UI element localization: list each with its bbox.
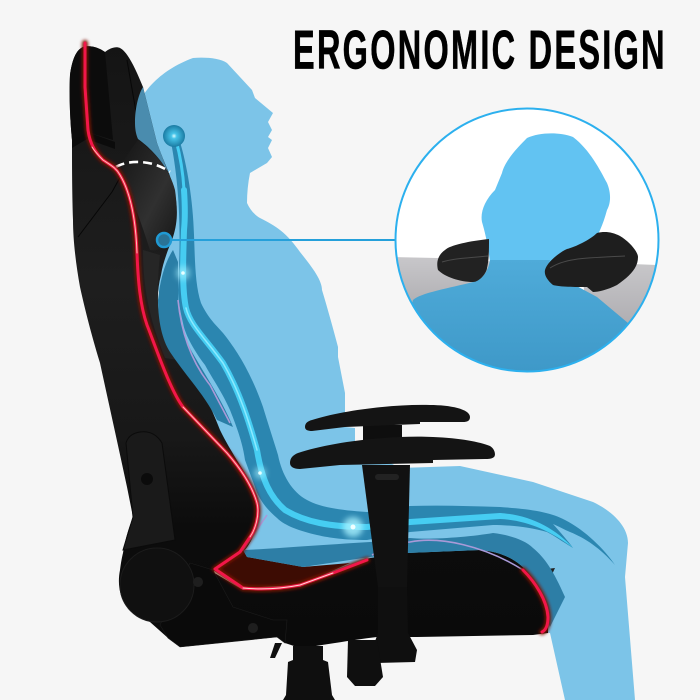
inner bolster	[143, 250, 178, 360]
cushion highlights	[442, 256, 625, 268]
bracket bolts	[193, 577, 258, 633]
lower armrest	[290, 437, 495, 469]
upper armrest pivot	[363, 425, 402, 440]
grey seat left	[398, 257, 490, 302]
connector line	[171, 239, 397, 241]
recline knob	[120, 548, 194, 622]
red chair contour	[85, 43, 548, 632]
right cushion	[545, 232, 638, 292]
lumbar pillow	[118, 140, 176, 250]
circle ring	[396, 108, 658, 372]
title: ERGONOMIC DESIGN	[293, 19, 667, 81]
post base	[373, 587, 417, 663]
spine tail	[500, 513, 573, 548]
seat front triangle	[530, 568, 555, 607]
post latch	[375, 474, 399, 480]
chair	[70, 46, 555, 648]
top ball node	[163, 125, 185, 147]
gas lift	[283, 646, 335, 700]
seat dark band	[243, 533, 565, 627]
left cushion	[437, 239, 489, 282]
headrest strap	[72, 132, 115, 149]
armrests	[290, 405, 495, 663]
base parts	[270, 640, 383, 700]
lumbar node ring	[157, 233, 171, 247]
mechanism bracket	[160, 563, 287, 647]
side plate hole	[141, 473, 153, 485]
seam details	[78, 60, 140, 237]
magnified head	[482, 133, 610, 270]
armrest post	[362, 465, 410, 587]
lever	[270, 643, 282, 658]
purple contour lines	[178, 300, 523, 570]
height knob	[347, 640, 383, 686]
dashed headrest line	[116, 162, 170, 172]
magnified circle	[394, 108, 660, 372]
headrest left fold	[70, 46, 113, 140]
lumbar dark overlay	[158, 250, 233, 427]
side plate	[123, 432, 175, 550]
spine cyan line	[176, 140, 500, 527]
glow points	[176, 266, 363, 537]
head overlap on chair	[135, 87, 168, 172]
grey seat right	[584, 264, 655, 323]
spine band dark	[171, 142, 615, 565]
upper armrest	[305, 405, 470, 431]
seated person silhouette	[135, 58, 635, 700]
seat red interior	[213, 550, 350, 588]
chair back shell	[70, 46, 548, 648]
magnified shoulders	[412, 260, 628, 370]
